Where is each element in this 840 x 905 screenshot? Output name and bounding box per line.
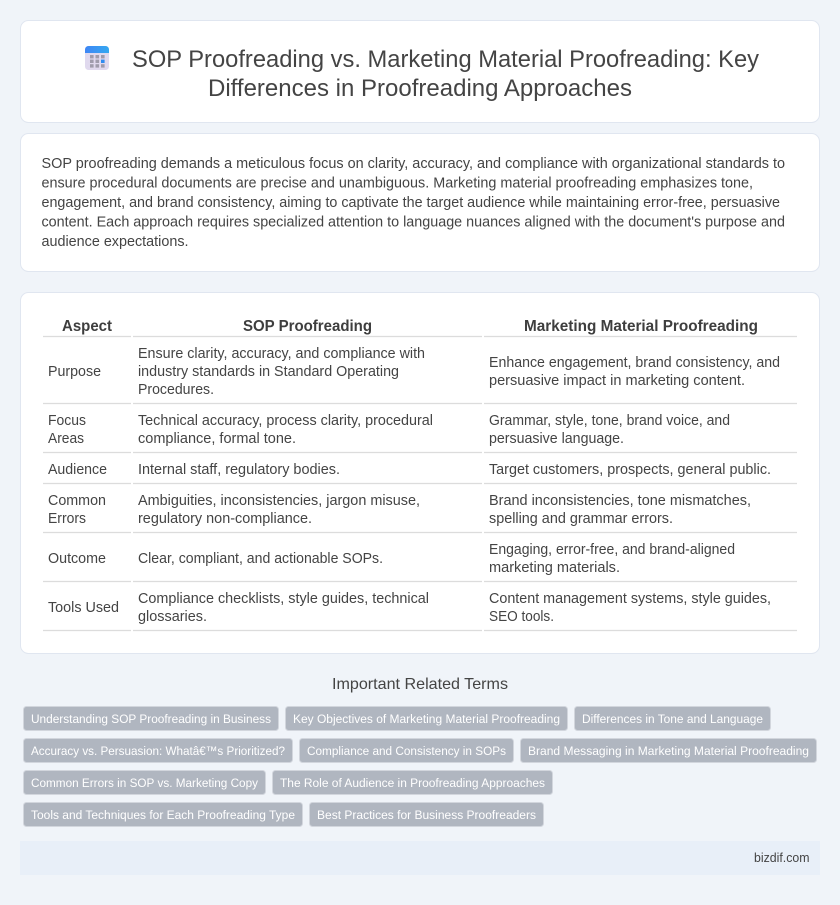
table row: focus areas: Grammar, style, tone, brand voice, and bbox=[489, 413, 730, 429]
table row: common errors: Errors bbox=[48, 511, 86, 527]
text block: intro paragraph bbox=[42, 156, 785, 250]
title: SOP Proofreading vs. Marketing Material Proofreading: Key bbox=[132, 46, 760, 73]
table row: focus areas bbox=[48, 413, 730, 447]
tag bbox=[520, 738, 816, 762]
panel: title card bbox=[20, 20, 820, 122]
table row: purpose: Purpose bbox=[48, 364, 101, 380]
table row: tools used: SEO tools. bbox=[489, 609, 554, 625]
tag: Key Objectives of Marketing Material Proofreading bbox=[293, 712, 560, 726]
title bbox=[132, 46, 760, 102]
panel: comparison table bbox=[20, 292, 820, 654]
icon: calendar bbox=[85, 46, 109, 70]
tag: Tools and Techniques for Each Proofreading Type bbox=[31, 808, 295, 822]
tag: Differences in Tone and Language bbox=[582, 712, 763, 726]
table row: audience bbox=[48, 462, 771, 478]
tag bbox=[24, 802, 302, 826]
heading: important related terms: Important Related Terms bbox=[332, 676, 508, 693]
table row: common errors: Common bbox=[48, 493, 106, 509]
tag bbox=[24, 738, 292, 762]
table row: purpose: persuasive impact in marketing content. bbox=[489, 373, 745, 389]
table row: common errors: Ambiguities, inconsistencies, jargon misuse, bbox=[138, 493, 420, 509]
table header: Aspect bbox=[62, 318, 113, 335]
table header bbox=[62, 318, 758, 335]
table row: common errors: Brand inconsistencies, tone mismatches, bbox=[489, 493, 751, 509]
table row: tools used: Compliance checklists, style guides, technical bbox=[138, 591, 429, 607]
tag bbox=[24, 770, 266, 794]
title: Differences in Proofreading Approaches bbox=[208, 75, 632, 102]
table row: tools used: Content management systems, style guides, bbox=[489, 591, 771, 607]
text block: intro paragraph: engagement, and brand consistency, aiming to captivate the target audience while maintaining error-free, persuasive bbox=[42, 195, 780, 211]
text block: intro paragraph: content. Each approach requires specialized attention to language nuances aligned with the document's purpose and bbox=[42, 214, 785, 230]
table row: outcome: marketing materials. bbox=[489, 560, 620, 576]
table row: common errors: spelling and grammar errors. bbox=[489, 511, 673, 527]
tag: Understanding SOP Proofreading in Business bbox=[31, 712, 271, 726]
table row: purpose: industry standards in Standard Operating bbox=[138, 364, 399, 380]
tag: Best Practices for Business Proofreaders bbox=[317, 808, 536, 822]
text block: intro paragraph: audience expectations. bbox=[42, 234, 188, 250]
tag bbox=[24, 706, 278, 730]
table header: Marketing Material Proofreading bbox=[524, 318, 758, 335]
table row: tools used bbox=[48, 591, 771, 625]
table row: audience: Audience bbox=[48, 462, 107, 478]
table row: outcome: Engaging, error-free, and brand-aligned bbox=[489, 542, 735, 558]
footer: bizdif.com bbox=[754, 850, 810, 865]
table row: focus areas: compliance, formal tone. bbox=[138, 431, 296, 447]
table row: outcome: Clear, compliant, and actionable SOPs. bbox=[138, 551, 383, 567]
table row: tools used: Tools Used bbox=[48, 600, 119, 616]
table row: purpose: Enhance engagement, brand consistency, and bbox=[489, 355, 780, 371]
tag bbox=[574, 706, 770, 730]
footer bbox=[20, 841, 820, 875]
tag bbox=[300, 738, 514, 762]
table row: focus areas: Areas bbox=[48, 431, 84, 447]
panel: introduction bbox=[20, 134, 820, 272]
table row: common errors: regulatory non-compliance. bbox=[138, 511, 312, 527]
tag bbox=[272, 770, 552, 794]
table header: SOP Proofreading bbox=[243, 318, 372, 335]
text block: intro paragraph: ensure procedural documents are precise and unambiguous. Marketing material proofreading emphasizes tone, bbox=[42, 176, 753, 192]
tag: Compliance and Consistency in SOPs bbox=[307, 744, 506, 758]
table row: focus areas: Technical accuracy, process clarity, procedural bbox=[138, 413, 433, 429]
panel: related term tags bbox=[24, 706, 816, 826]
table row: focus areas: Focus bbox=[48, 413, 86, 429]
tag bbox=[310, 802, 544, 826]
tag: Accuracy vs. Persuasion: Whatâ€™s Prioritized? bbox=[31, 744, 285, 758]
text block: intro paragraph: SOP proofreading demands a meticulous focus on clarity, accuracy, and compliance with organizational standards to bbox=[42, 156, 785, 172]
table row: tools used: glossaries. bbox=[138, 609, 207, 625]
table row: outcome: Outcome bbox=[48, 551, 106, 567]
tag: Brand Messaging in Marketing Material Proofreading bbox=[528, 744, 809, 758]
table row: outcome bbox=[48, 542, 735, 576]
table row: focus areas: persuasive language. bbox=[489, 431, 624, 447]
table row: purpose: Procedures. bbox=[138, 382, 214, 398]
tag: Common Errors in SOP vs. Marketing Copy bbox=[31, 776, 259, 790]
table row: common errors bbox=[48, 493, 751, 527]
table row: audience: Internal staff, regulatory bodies. bbox=[138, 462, 340, 478]
table row: purpose: Ensure clarity, accuracy, and compliance with bbox=[138, 346, 425, 362]
table row: purpose bbox=[48, 346, 780, 398]
tag: The Role of Audience in Proofreading Approaches bbox=[280, 776, 545, 790]
table row: audience: Target customers, prospects, general public. bbox=[489, 462, 771, 478]
tag bbox=[286, 706, 568, 730]
